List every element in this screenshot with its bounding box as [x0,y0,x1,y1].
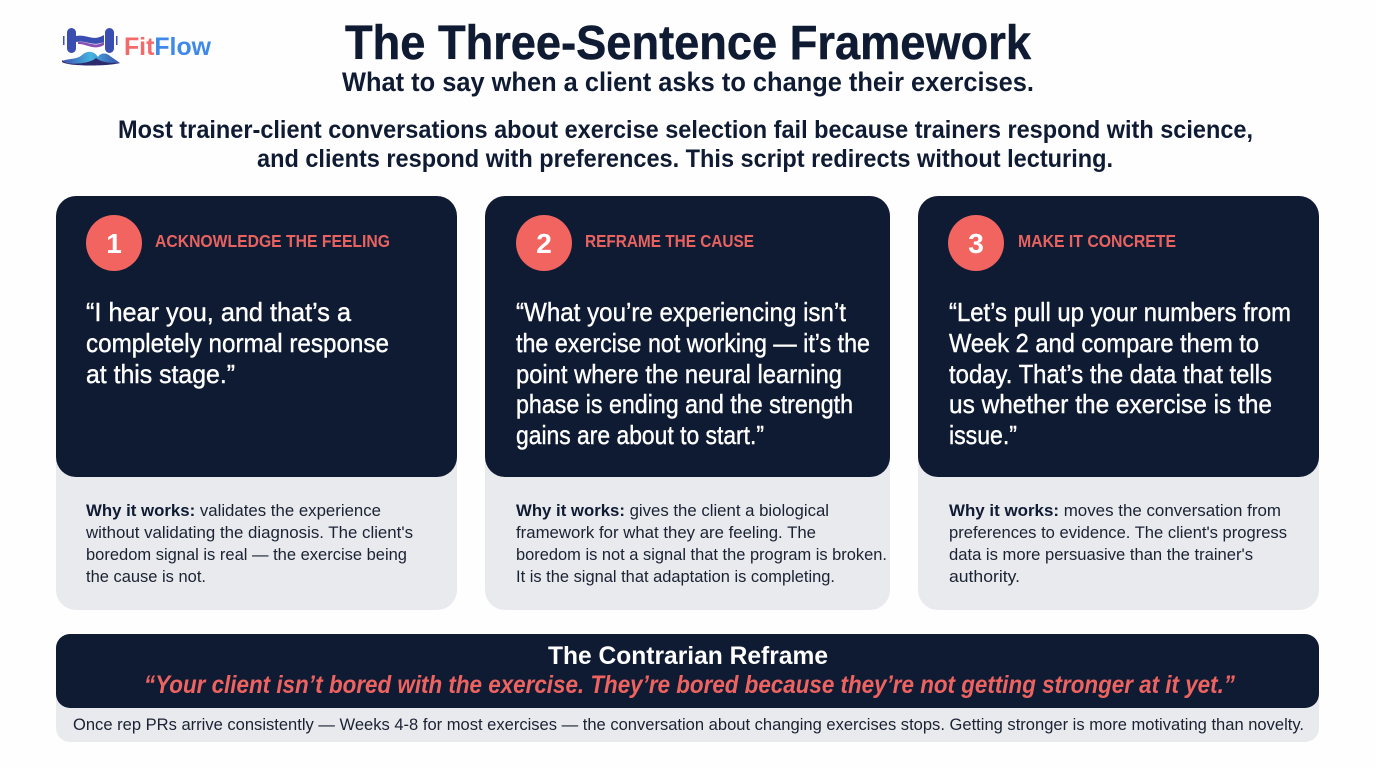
step 1 why it works [85,502,413,586]
step 2 quote: point where the neural learning [516,359,842,389]
reframe heading: The Contrarian Reframe [548,642,828,670]
step 2 why it works: framework for what they are feeling. The [516,524,816,542]
step 2 quote [516,297,870,450]
step 1 why it works: Why it works: validates the experience [86,502,381,520]
step 2 why it works [516,502,887,586]
step 2 quote: the exercise not working — it’s the [516,328,870,358]
reframe quote: “Your client isn’t bored with the exercise. They’re bored because they’re not getting stronger at it yet.” [144,671,1235,699]
step 2 quote: “What you’re experiencing isn’t [516,297,847,327]
step 2 label: REFRAME THE CAUSE [585,231,754,251]
step 3 quote: today. That’s the data that tells [949,359,1272,389]
subtitle: What to say when a client asks to change their exercises. [342,67,1034,97]
step 3 why it works: Why it works: moves the conversation from [949,502,1281,520]
step 1 quote: “I hear you, and that’s a [86,297,352,327]
step 2 quote: gains are about to start.” [516,420,764,450]
step 3 quote: “Let’s pull up your numbers from [949,297,1291,327]
title: The Three-Sentence Framework [345,17,1031,70]
step 1 quote [86,297,389,389]
icon: dumbbell and wave [62,28,120,66]
panel: step 1 [56,196,457,610]
icon: number 3: 3 [968,228,984,259]
panel: step 2 [485,196,890,610]
panel: the contrarian reframe [56,634,1319,742]
step 2 why it works: Why it works: gives the client a biological [516,502,829,520]
step 3 why it works: preferences to evidence. The client's progress [949,524,1287,542]
step 2 why it works: It is the signal that adaptation is completing. [516,568,835,586]
icon: number 3 [948,215,1004,271]
step 1 quote: at this stage.” [86,359,235,389]
step 3 quote [949,297,1291,450]
step 3 why it works [949,502,1287,586]
icon: number 1: 1 [106,228,122,259]
step 3 why it works: authority. [949,568,1020,586]
step 2 why it works: boredom is not a signal that the program is broken. [516,546,887,564]
panel: step 3 [918,196,1319,610]
step 3 quote: us whether the exercise is the [949,389,1272,419]
step 2 quote: phase is ending and the strength [516,389,853,419]
step 3 quote: issue.” [949,420,1017,450]
step 1 why it works: boredom signal is real — the exercise being [86,546,407,564]
wordmark: FitFlow [124,33,212,61]
step 1 quote: completely normal response [86,328,389,358]
step 1 why it works: the cause is not. [86,568,206,586]
step 3 why it works: data is more persuasive than the trainer's [949,546,1253,564]
icon: number 1 [86,215,142,271]
intro text: and clients respond with preferences. This script redirects without lecturing. [257,145,1113,173]
intro text: Most trainer-client conversations about exercise selection fail because trainers respond with science, [118,116,1253,144]
step 3 label: MAKE IT CONCRETE [1018,231,1176,251]
intro text [118,116,1253,173]
step 1 label: ACKNOWLEDGE THE FEELING [155,231,390,251]
logo: FitFlow [62,28,212,66]
reframe note: Once rep PRs arrive consistently — Weeks 4-8 for most exercises — the conversation about changing exercises stops. Getting stronger is more motivating than novelty. [73,715,1304,734]
icon: number 2: 2 [536,228,552,259]
icon: number 2 [516,215,572,271]
step 1 why it works: without validating the diagnosis. The client's [85,524,413,542]
step 3 quote: Week 2 and compare them to [949,328,1259,358]
